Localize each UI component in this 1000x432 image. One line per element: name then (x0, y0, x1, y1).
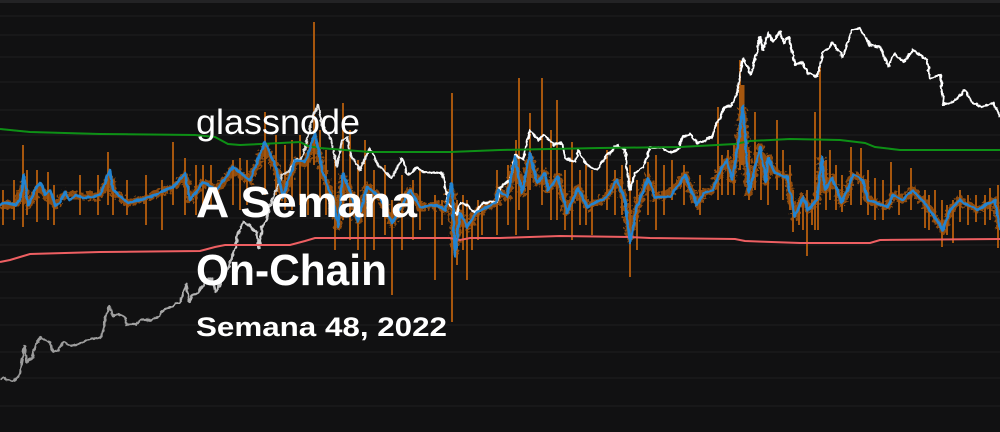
red line (0, 236, 1000, 262)
logo: glassnode: glassnode (196, 103, 360, 142)
blue smoothed series (0, 105, 1000, 257)
title line 1: A Semana (196, 178, 418, 227)
title line 2: On-Chain (196, 246, 387, 295)
green line (0, 129, 1000, 152)
orange raw series (0, 22, 1000, 322)
subtitle: Semana 48, 2022 (196, 312, 447, 342)
